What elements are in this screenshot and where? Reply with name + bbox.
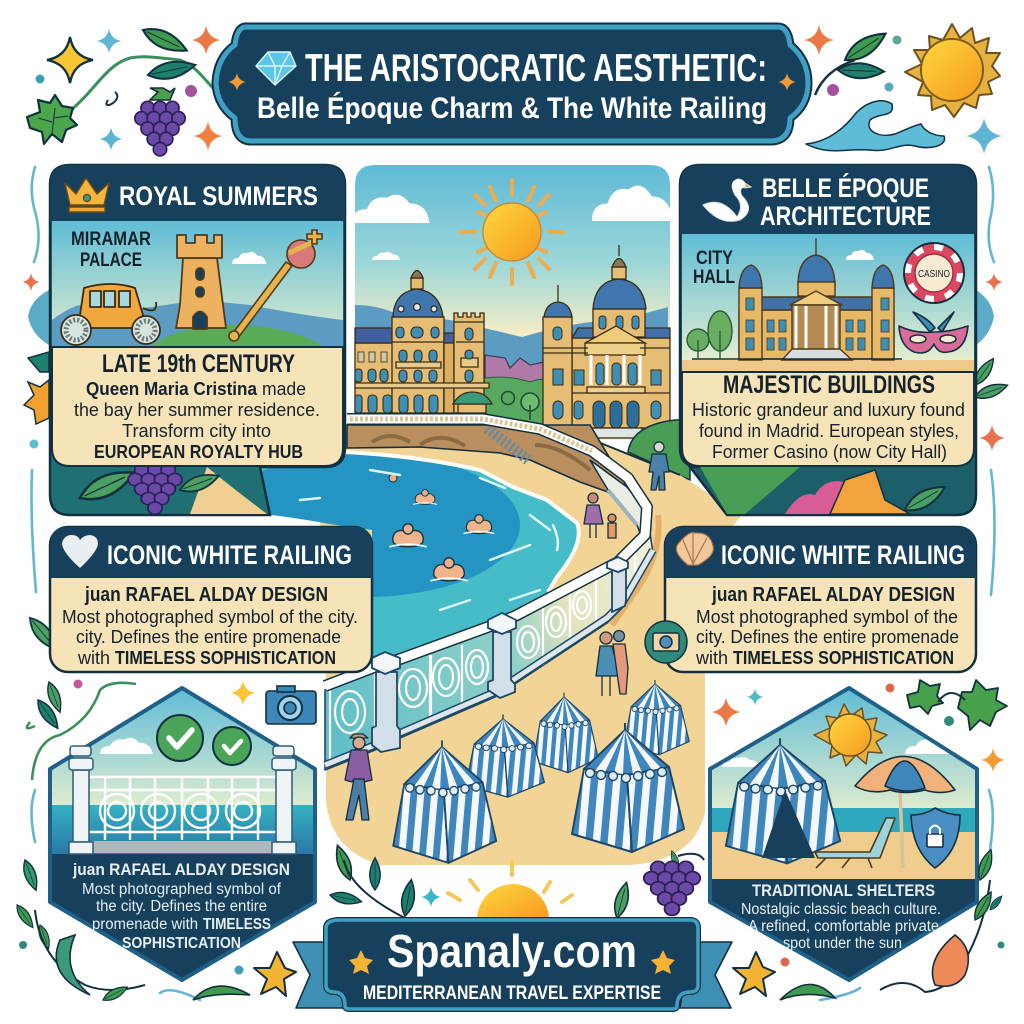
icon: sun bbox=[814, 704, 887, 766]
railing base bbox=[325, 550, 653, 765]
city hall label: CITY bbox=[696, 248, 733, 269]
card header bbox=[50, 165, 345, 222]
icon: carnival mask bbox=[899, 312, 968, 353]
icon: casino chip: CASINO bbox=[918, 268, 950, 280]
title banner bbox=[216, 27, 808, 141]
icon: lounge chair bbox=[815, 818, 895, 868]
decoration: bottom centre sprig and sun bbox=[329, 843, 572, 920]
footer title: Spanaly.com bbox=[387, 925, 637, 977]
card text: TIMELESS SOPHISTICATION bbox=[733, 648, 954, 668]
corner decoration: top right sun, wave and stars bbox=[804, 24, 1002, 154]
left palace bbox=[355, 270, 492, 413]
hexagon text: the city. Defines the entire bbox=[96, 898, 267, 915]
water bbox=[230, 452, 579, 664]
card text: EUROPEAN ROYALTY HUB bbox=[94, 441, 303, 462]
decoration: bottom right foliage bbox=[733, 848, 1004, 1000]
hexagon text: SOPHISTICATION bbox=[122, 935, 241, 952]
card text: Transform city into bbox=[122, 421, 271, 441]
decoration: right vine by hexagon bbox=[712, 680, 1007, 772]
hexagon text: spot under the sun bbox=[783, 935, 902, 952]
card text: juan RAFAEL ALDAY DESIGN bbox=[84, 584, 328, 606]
icon: swan bbox=[703, 179, 751, 221]
hexagon text: TIMELESS bbox=[203, 916, 271, 933]
front lattice bbox=[325, 533, 653, 770]
card scene bbox=[52, 221, 343, 348]
city hall label bbox=[693, 248, 735, 288]
card text: juan RAFAEL ALDAY DESIGN bbox=[711, 584, 955, 606]
back lattice bbox=[590, 460, 643, 533]
panel: right hexagon shelters bbox=[710, 688, 977, 984]
ribbon ends bbox=[293, 942, 732, 1008]
title text: THE ARISTOCRATIC AESTHETIC: bbox=[305, 47, 767, 90]
card heading bbox=[760, 172, 931, 231]
icon: casino chip bbox=[904, 243, 964, 303]
title text bbox=[257, 47, 767, 125]
card text: the bay her summer residence. bbox=[74, 400, 320, 420]
icon: carriage bbox=[61, 284, 160, 345]
panel: iconic white railing left bbox=[50, 527, 372, 672]
card text: LATE 19th CENTURY bbox=[102, 350, 295, 378]
footer banner bbox=[293, 920, 732, 1009]
icon: umbrella bbox=[855, 756, 955, 868]
hexagon text: promenade with bbox=[92, 916, 198, 933]
sun in sky bbox=[460, 180, 564, 284]
card text: city. Defines the entire promenade bbox=[76, 627, 341, 647]
footer stars bbox=[349, 950, 675, 974]
hexagon text: Most photographed symbol of bbox=[82, 881, 282, 898]
outer sand shadow bbox=[612, 515, 659, 625]
card scene bbox=[682, 234, 974, 372]
miramar label: MIRAMAR bbox=[71, 229, 151, 250]
card text: with bbox=[695, 648, 728, 668]
card text: Most photographed symbol of the city. bbox=[62, 607, 358, 627]
icon: tower bbox=[176, 235, 226, 329]
hexagon text: A refined, comfortable private bbox=[748, 918, 939, 935]
title text: Belle Époque Charm & The White Railing bbox=[257, 91, 767, 125]
side decorations bbox=[32, 167, 994, 1000]
white railing bbox=[325, 419, 659, 770]
seawall bbox=[347, 425, 627, 492]
hexagon text: Nostalgic classic beach culture. bbox=[741, 901, 941, 918]
card header bbox=[680, 165, 976, 235]
card text: with bbox=[77, 648, 110, 668]
miramar label bbox=[71, 229, 151, 271]
card text bbox=[692, 371, 965, 462]
card text: Historic grandeur and luxury found bbox=[692, 400, 965, 420]
icon: diamond bbox=[256, 52, 296, 85]
icon: seashell bbox=[676, 532, 713, 565]
card text box bbox=[52, 347, 343, 466]
card header bbox=[665, 527, 976, 578]
decoration: bottom grapes bbox=[611, 850, 704, 920]
railing illustration bbox=[69, 746, 296, 854]
beach: sand, water and hill bbox=[207, 419, 742, 865]
striped tents bbox=[393, 680, 689, 863]
card heading: ICONIC WHITE RAILING bbox=[107, 540, 352, 570]
icon: scepter bbox=[229, 230, 322, 341]
panel: royal summers bbox=[50, 165, 345, 515]
footer tagline: MEDITERRANEAN TRAVEL EXPERTISE bbox=[363, 983, 661, 1004]
card text: found in Madrid. European styles, bbox=[699, 421, 959, 441]
card text: MAJESTIC BUILDINGS bbox=[723, 371, 935, 399]
icon: heart bbox=[62, 535, 98, 568]
card header bbox=[50, 527, 372, 578]
city hall label: HALL bbox=[693, 267, 735, 288]
railing posts bbox=[372, 557, 628, 752]
swimmers bbox=[389, 474, 494, 581]
panel: iconic white railing right bbox=[645, 527, 976, 672]
card text: made bbox=[262, 379, 306, 399]
icon: camera badge bbox=[645, 621, 687, 663]
card text: Queen Maria Cristina bbox=[86, 379, 258, 399]
hexagon text: TRADITIONAL SHELTERS bbox=[752, 881, 935, 900]
hexagon text bbox=[72, 860, 290, 952]
card heading: BELLE ÉPOQUE bbox=[762, 172, 929, 203]
hexagon text: juan RAFAEL ALDAY DESIGN bbox=[72, 860, 290, 879]
card text bbox=[695, 584, 959, 668]
card text: Most photographed symbol of the bbox=[696, 607, 958, 627]
corner decoration: top left vine, grapes and stars bbox=[27, 23, 222, 156]
icon: check badges bbox=[157, 715, 251, 765]
side ornaments right bbox=[971, 273, 1009, 451]
card text: Former Casino (now City Hall) bbox=[712, 442, 947, 462]
decoration: left vine by hexagon bbox=[27, 680, 316, 780]
hexagon text bbox=[741, 881, 941, 952]
central scene: sky and city bbox=[352, 165, 673, 440]
people bbox=[345, 442, 669, 820]
card text bbox=[74, 350, 320, 462]
panel: left hexagon railing bbox=[50, 688, 315, 984]
decoration: bottom left foliage bbox=[13, 858, 296, 1004]
card text bbox=[62, 584, 358, 668]
card text: TIMELESS SOPHISTICATION bbox=[115, 648, 336, 668]
panel: belle epoque architecture bbox=[680, 165, 976, 516]
railing top bbox=[325, 419, 647, 686]
mountains bbox=[355, 305, 668, 420]
miramar label: PALACE bbox=[80, 250, 142, 271]
icon: city hall building bbox=[739, 238, 894, 360]
icon: shield with padlock bbox=[911, 808, 960, 868]
card text box bbox=[682, 372, 974, 466]
icon: trees bbox=[687, 311, 732, 359]
icon: crown bbox=[65, 178, 109, 212]
right palace bbox=[543, 245, 670, 438]
icon: tent bbox=[726, 738, 840, 863]
side ornaments left bbox=[22, 273, 62, 654]
card heading: ARCHITECTURE bbox=[760, 201, 931, 231]
card heading: ICONIC WHITE RAILING bbox=[721, 540, 965, 570]
card heading: ROYAL SUMMERS bbox=[119, 181, 318, 211]
card text: city. Defines the entire promenade bbox=[696, 627, 959, 647]
icon: camera bbox=[266, 686, 316, 724]
